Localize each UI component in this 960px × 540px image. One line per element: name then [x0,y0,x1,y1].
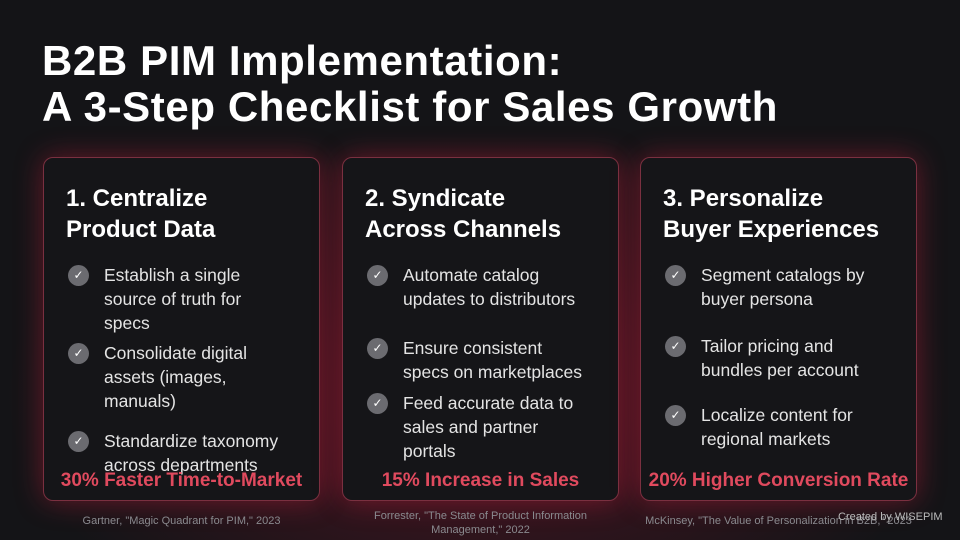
panel: personalize: ✓ [670,408,681,422]
bullet 3c: Localize content for [701,405,853,425]
stat 3: 20% Higher Conversion Rate [649,470,908,491]
stat 2: 15% Increase in Sales [382,470,579,491]
source 3: McKinsey, "The Value of Personalization in B2B," 2023 [645,515,912,527]
panel: personalize: ✓ [670,339,681,353]
heading 2: Across Channels [365,216,561,243]
bullet 1b: Consolidate digital [104,343,247,363]
panel: syndicate [342,157,619,501]
title: B2B PIM Implementation: [42,37,562,84]
bullet 1b: manuals) [104,391,176,411]
title [42,37,778,130]
bullet 2c: sales and partner [403,417,538,437]
bullet 2c [367,393,573,461]
heading 3: 3. Personalize [663,185,823,212]
bullet 2a: updates to distributors [403,289,575,309]
heading 1 [66,185,216,243]
bullet 2a: Automate catalog [403,265,539,285]
panel: centralize: ✓ [73,268,84,282]
credit: Created by WISEPIM [838,511,943,523]
bullet 3b: bundles per account [701,360,859,380]
heading 2 [365,185,561,243]
heading 3 [663,185,879,243]
panel: centralize [43,157,320,501]
bullet 3b: Tailor pricing and [701,336,833,356]
bullet 1a: source of truth for [104,289,241,309]
bullet 2c: portals [403,441,456,461]
bullet 1c: across departments [104,455,258,475]
bullet 2a [367,265,575,309]
bullet 2b: specs on marketplaces [403,362,582,382]
bullet 1c [68,431,278,475]
bullet 2b [367,338,582,382]
bullet 3c [665,405,853,449]
source 2: Forrester, "The State of Product Information [374,510,587,522]
heading 2: 2. Syndicate [365,185,505,212]
bullet 1b: assets (images, [104,367,227,387]
bullet 3c: regional markets [701,429,830,449]
stat 1: 30% Faster Time-to-Market [61,470,302,491]
source 2: Management," 2022 [431,524,530,536]
panel: personalize: ✓ [670,268,681,282]
bullet 1a [68,265,241,333]
title: A 3-Step Checklist for Sales Growth [42,83,778,130]
panel: syndicate: ✓ [372,396,383,410]
bullet 3b [665,336,859,380]
panel: centralize: ✓ [73,346,84,360]
heading 1: Product Data [66,216,215,243]
bullet 3a: buyer persona [701,289,813,309]
bullet 2b: Ensure consistent [403,338,542,358]
panel: syndicate: ✓ [372,341,383,355]
source 2 [374,510,587,536]
bullet 1a: Establish a single [104,265,240,285]
bullet 1a: specs [104,313,150,333]
source 1: Gartner, "Magic Quadrant for PIM," 2023 [83,515,280,527]
bullet 3a [665,265,864,309]
bullet 1b [68,343,247,411]
panel: personalize [640,157,917,501]
panel: syndicate: ✓ [372,268,383,282]
heading 1: 1. Centralize [66,185,207,212]
bullet 3a: Segment catalogs by [701,265,864,285]
heading 3: Buyer Experiences [663,216,879,243]
bullet 1c: Standardize taxonomy [104,431,278,451]
bullet 2c: Feed accurate data to [403,393,573,413]
panel: centralize: ✓ [73,434,84,448]
